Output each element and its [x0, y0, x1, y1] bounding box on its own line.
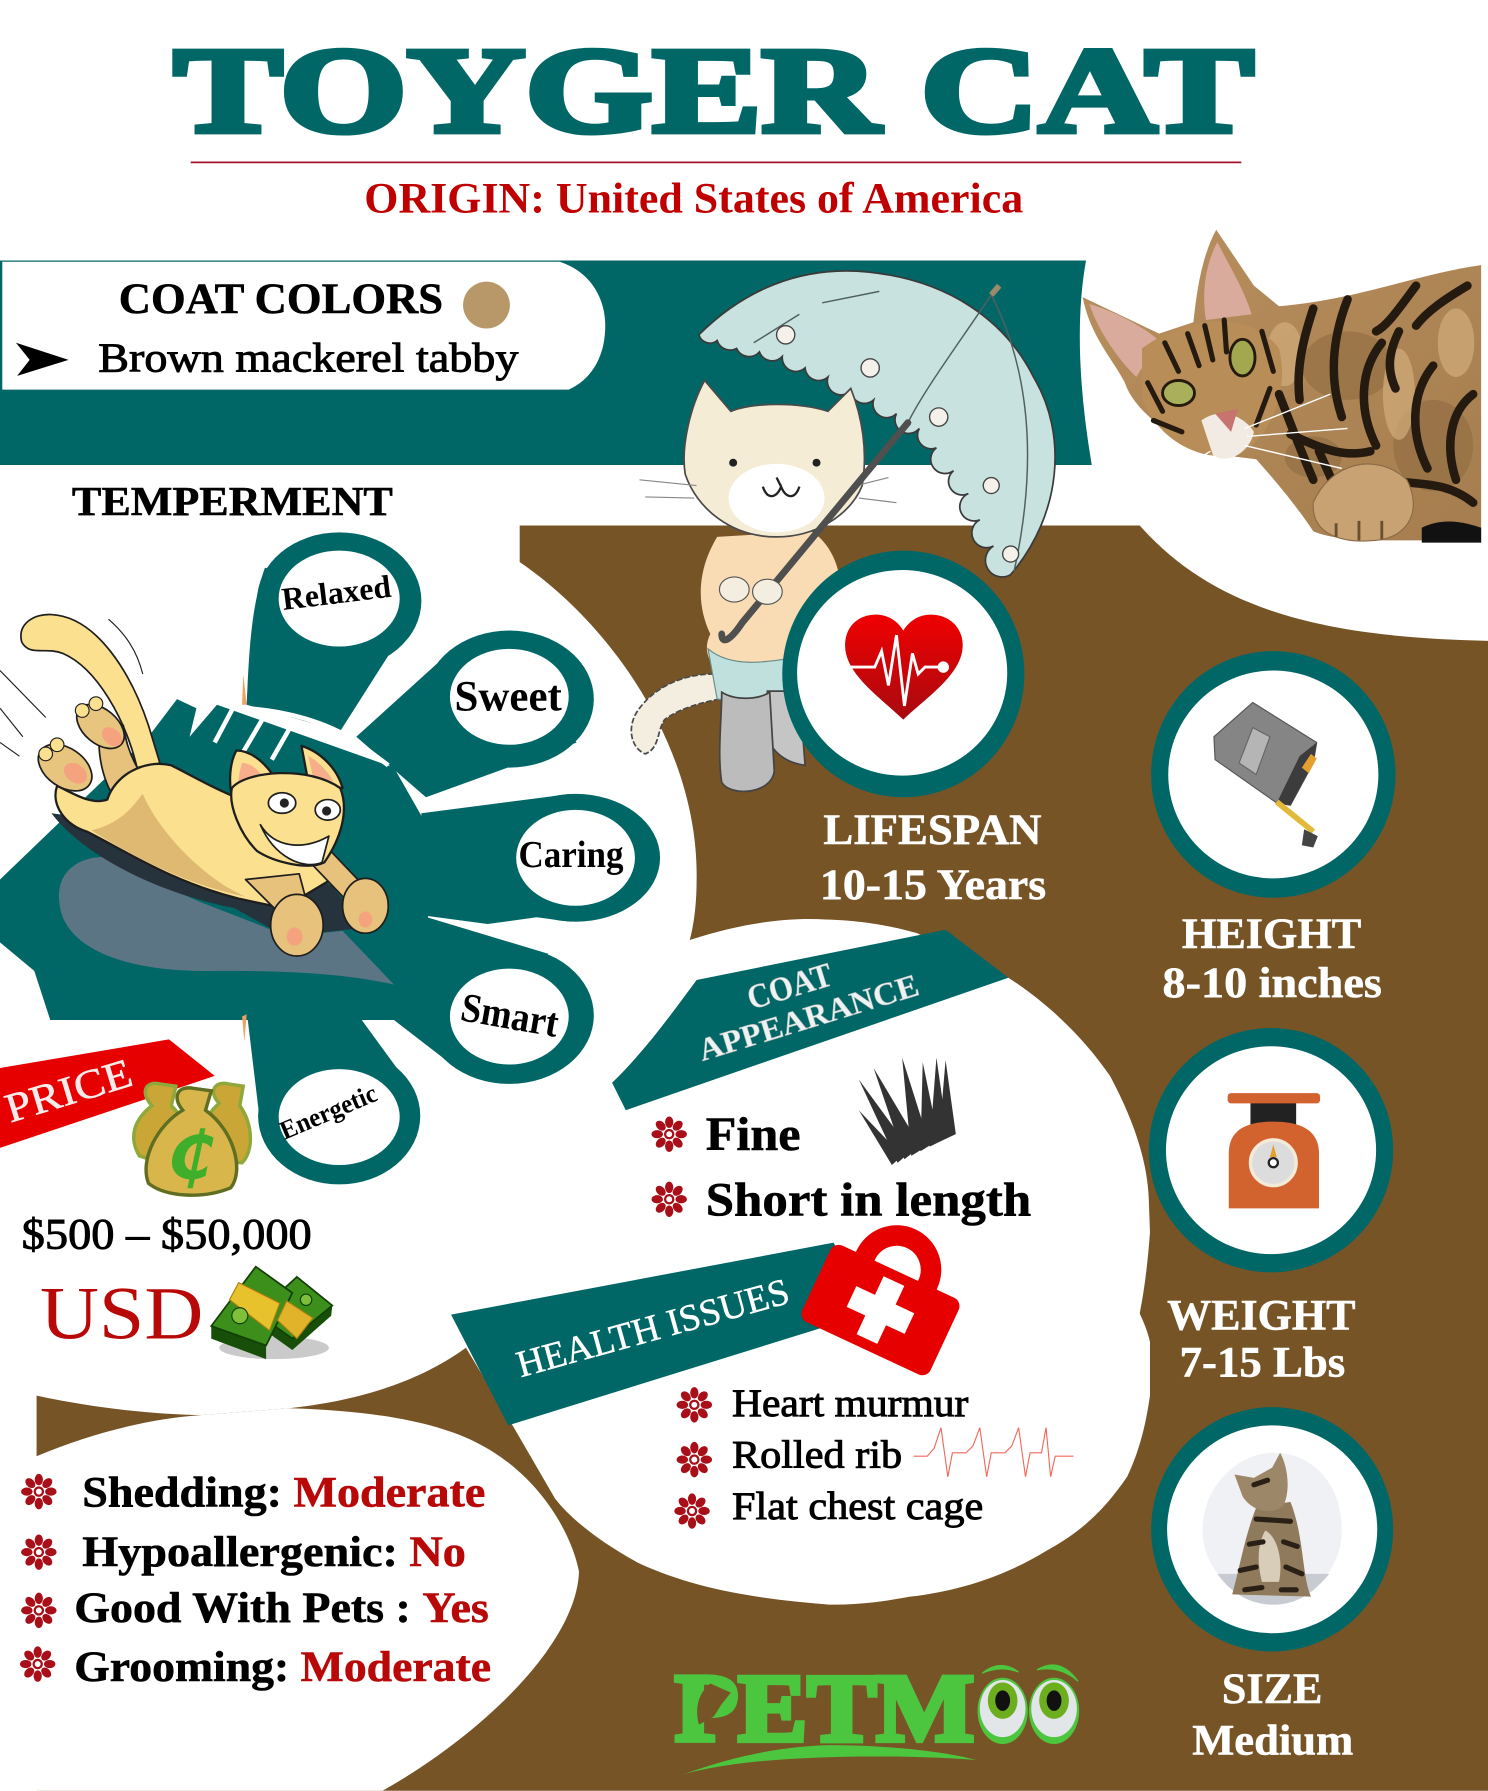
- price currency: USD: [40, 1273, 203, 1356]
- handle: [722, 423, 908, 640]
- lifespan value: 10-15 Years: [820, 861, 1046, 909]
- icon: arrow: [16, 343, 69, 376]
- ring: [1149, 1028, 1393, 1272]
- list: breed traits: [20, 1468, 491, 1691]
- photo: kitten: [1203, 1453, 1342, 1605]
- dog silhouette notch: [697, 1683, 731, 1725]
- icon: tape measure: [1214, 703, 1318, 848]
- swoosh: [682, 1745, 976, 1775]
- price range: $500 – $50,000: [22, 1210, 312, 1258]
- petal: relaxed: [247, 532, 421, 731]
- issue: rolled rib: [677, 1434, 902, 1477]
- banner: [612, 930, 1008, 1110]
- eyes: [1230, 339, 1255, 376]
- trait: hypoallergenic: Hypoallergenic: No: [82, 1528, 466, 1576]
- illustration: running cartoon cat: [0, 614, 394, 985]
- trait: shedding: Shedding: Moderate: [82, 1468, 485, 1516]
- lifespan label: LIFESPAN: [823, 806, 1041, 854]
- panel: lifespan: [782, 551, 1046, 909]
- head: [231, 773, 344, 866]
- petal: caring: [419, 794, 660, 924]
- fur tones: [1285, 331, 1473, 491]
- logo: petmoo: [675, 1656, 1079, 1775]
- title: TOYGER CAT: [174, 24, 1254, 159]
- pants: [708, 649, 799, 708]
- paw: [1313, 464, 1413, 541]
- weight value: 7-15 Lbs: [1180, 1338, 1345, 1386]
- subtitle: origin: ORIGIN: United States of America: [364, 175, 1024, 223]
- trait: short: Short in length: [706, 1173, 1031, 1226]
- trait: grooming: Grooming: Moderate: [74, 1643, 491, 1691]
- rear leg: [99, 725, 143, 805]
- icon: heart: [845, 615, 963, 720]
- body shadow: [51, 813, 365, 937]
- icon: money bags: [134, 1083, 250, 1195]
- weight label: WEIGHT: [1167, 1291, 1356, 1339]
- panel: coat appearance: [612, 930, 1031, 1226]
- trait: fine: Fine: [706, 1108, 801, 1161]
- petal: energetic: Energetic: [275, 1079, 381, 1145]
- ears: [230, 750, 274, 805]
- photo: tabby cat: [1083, 230, 1481, 543]
- height value: 8-10 inches: [1163, 959, 1382, 1007]
- petal: smart: [361, 915, 594, 1084]
- face: [729, 464, 825, 532]
- ring: [1151, 1407, 1393, 1651]
- trait: good with pets: Good With Pets : Yes: [74, 1584, 489, 1632]
- floor shadow: [59, 857, 394, 985]
- background: brown field: [37, 525, 1488, 1791]
- ear inner: [1089, 242, 1252, 377]
- heading: temperament: TEMPERMENT: [72, 478, 393, 524]
- petal: sweet: [356, 631, 594, 797]
- hands: [719, 577, 749, 602]
- banner: price: [0, 1039, 215, 1148]
- background: lower-left white blob: [0, 1396, 579, 1791]
- banner: [451, 1243, 868, 1425]
- eyes: [268, 793, 296, 813]
- currency mark: ₵: [160, 1117, 222, 1195]
- size value: Medium: [1192, 1716, 1353, 1764]
- banner: price: PRICE: [0, 1049, 137, 1131]
- petal: sweet: Sweet: [455, 672, 562, 720]
- icon: cash stack: [211, 1267, 332, 1359]
- hub shape: [0, 699, 432, 1020]
- petal: energetic: [247, 994, 420, 1184]
- issue: flat chest: Flat chest cage: [732, 1485, 983, 1528]
- icon: scale: [1228, 1093, 1320, 1208]
- size label: SIZE: [1222, 1665, 1322, 1713]
- paws: [30, 696, 388, 956]
- petal: caring: Caring: [518, 834, 624, 876]
- panel: coat colors: [2, 262, 605, 390]
- tail: [631, 674, 719, 754]
- illustration: cat with umbrella: [631, 271, 1055, 791]
- front legs: [246, 874, 308, 914]
- body: [55, 764, 331, 908]
- belly tone: [91, 794, 246, 897]
- trait: fine: [651, 1108, 801, 1161]
- eyes: [978, 1665, 1079, 1744]
- head: [684, 380, 864, 537]
- height label: HEIGHT: [1182, 910, 1361, 958]
- umbrella canopy: [699, 271, 1055, 577]
- face: [1142, 321, 1282, 456]
- petal: relaxed: Relaxed: [280, 569, 393, 617]
- umbrella mice: [777, 326, 1019, 562]
- banner heading: COAT: [743, 956, 837, 1017]
- boots: [765, 691, 805, 765]
- heading: coat colors: COAT COLORS: [119, 275, 443, 323]
- stripes: [1279, 286, 1473, 503]
- issue: rolled rib: Rolled rib: [732, 1434, 902, 1477]
- banner heading: APPEARANCE: [694, 968, 923, 1068]
- teal band: [0, 261, 1092, 465]
- umbrella ribs: [754, 291, 1028, 571]
- issue: heart murmur: Heart murmur: [732, 1382, 968, 1425]
- color swatch: [463, 282, 510, 329]
- ring: [782, 551, 1024, 797]
- background: upper-left and coat white blob: [0, 457, 1150, 1605]
- body: [701, 531, 840, 697]
- panel: health issues: [451, 1210, 1073, 1529]
- muzzle: [1201, 413, 1254, 459]
- tail: [21, 614, 160, 768]
- wordmark: PETM: [675, 1656, 974, 1762]
- icon: first aid bag: [798, 1210, 977, 1378]
- petal: smart: Smart: [458, 984, 562, 1046]
- panel: size: [1151, 1407, 1393, 1764]
- whiskers: [1153, 394, 1348, 486]
- banner heading: HEALTH ISSUES: [512, 1271, 794, 1386]
- icon: ecg line: [914, 1428, 1073, 1477]
- mouth: [260, 825, 329, 865]
- panel: weight: [1149, 1028, 1393, 1386]
- coat color value: Brown mackerel tabby: [98, 334, 519, 380]
- panel: height: [1151, 651, 1395, 1007]
- ring: [1151, 651, 1395, 898]
- chart: temperament hub: [0, 532, 660, 1184]
- icon: fur tuft: [859, 1058, 956, 1165]
- motion lines: [0, 619, 143, 756]
